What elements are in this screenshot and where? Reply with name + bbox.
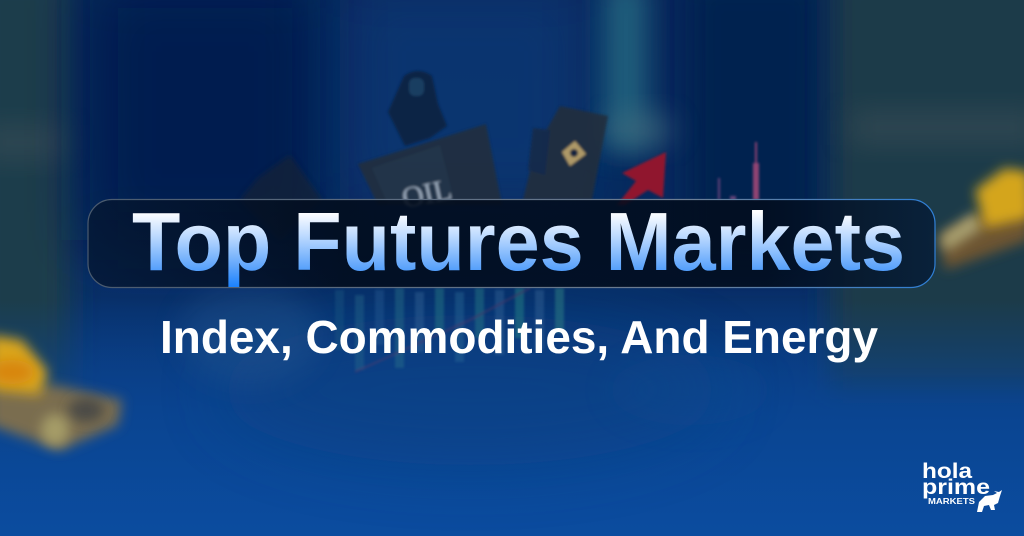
icon: oil barrel with weight [358, 71, 502, 215]
illustration: gold bar lower left [0, 335, 122, 450]
subtitle: Index, Commodities, And Energy [160, 311, 878, 363]
icon: tilted dark barrel with drop label [523, 106, 608, 200]
chart: pink candlestick at upper right [718, 142, 759, 200]
icon: bull [977, 490, 1002, 512]
logo: hola prime markets [922, 460, 1002, 512]
chart: faded candlesticks behind the title [335, 288, 564, 372]
icon: red rising arrow [617, 152, 666, 205]
title pill [88, 195, 935, 288]
icon: oil barrel with weight: OIL [399, 173, 455, 215]
icon: small barrel at left [240, 155, 322, 240]
logo: hola prime markets: hola [922, 460, 972, 483]
heading: title: Top Futures Markets [132, 195, 905, 288]
logo: hola prime markets: prime [922, 476, 990, 499]
illustration: blurred hand silhouette [180, 285, 770, 425]
illustration: gold bar upper right [940, 168, 1024, 270]
logo: hola prime markets: MARKETS [928, 497, 976, 506]
